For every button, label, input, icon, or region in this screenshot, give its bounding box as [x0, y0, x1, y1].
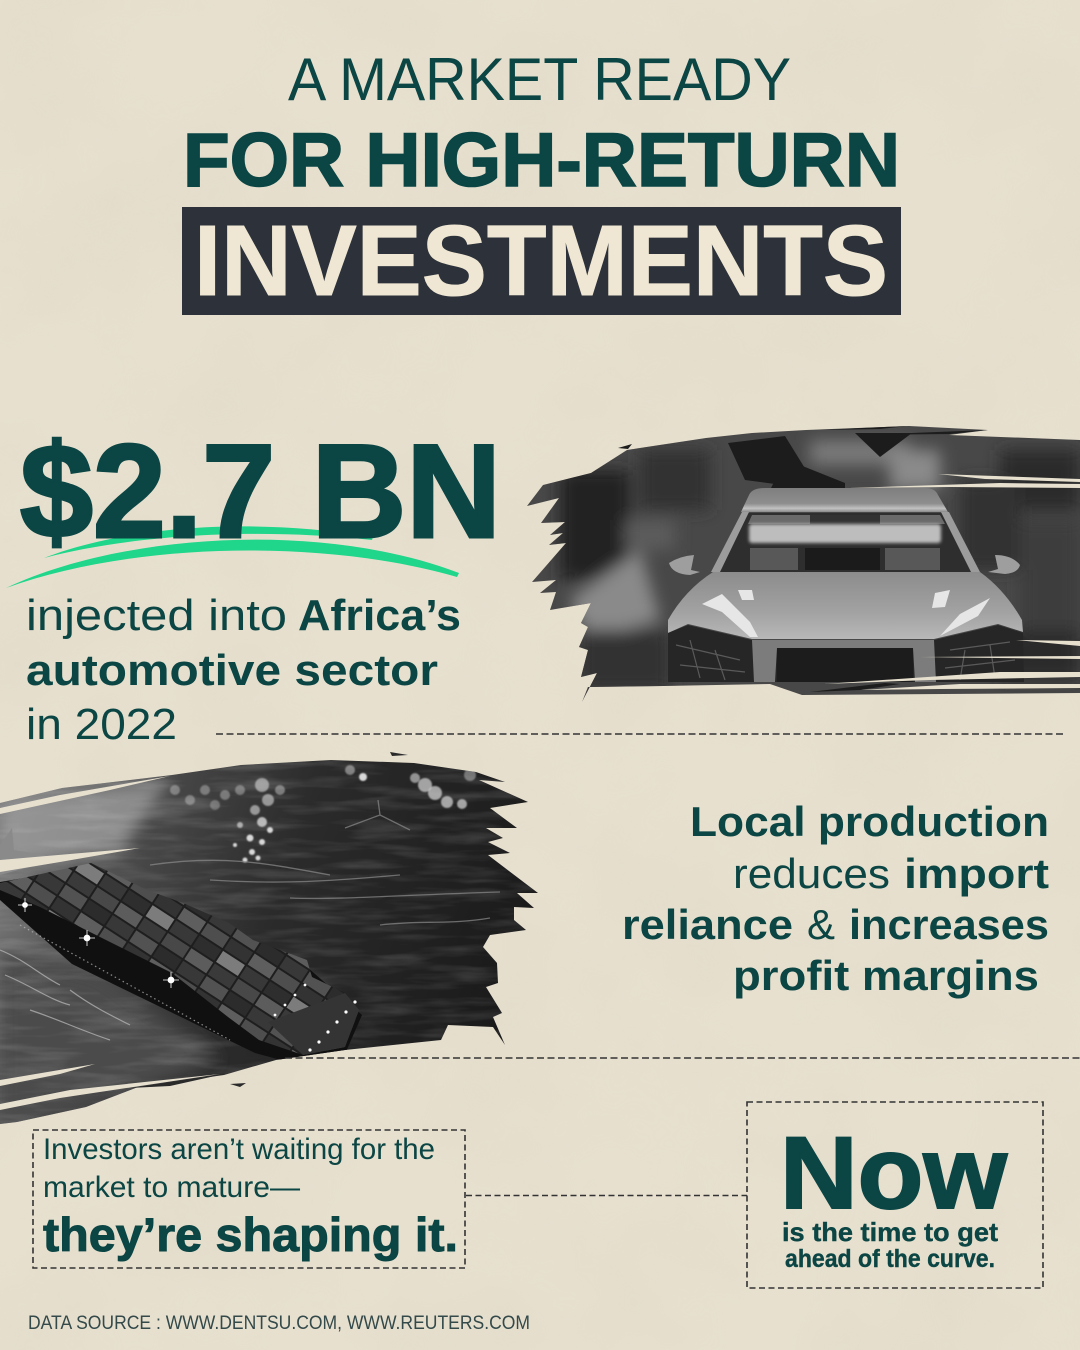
- panel: container ship photo: [0, 752, 540, 1130]
- data source footer: DATA SOURCE : WWW.DENTSU.COM, WWW.REUTERS.COM: [28, 1313, 530, 1334]
- callout: now is the time: Now: [780, 1116, 1008, 1230]
- brush streaks: [545, 468, 1080, 690]
- title line: a market ready: A MARKET READY: [288, 46, 791, 113]
- hood reflections: [702, 590, 990, 637]
- car mirrors: [669, 555, 1020, 575]
- car front end: [668, 625, 1024, 682]
- car windshield: [711, 512, 980, 572]
- panel: car assembly photo: [520, 420, 1080, 710]
- callout: now is the time: [747, 1102, 1043, 1288]
- callout: investors shaping the market: [33, 1130, 465, 1268]
- dark brush flicks: [618, 426, 988, 692]
- text block: automotive investment: Africa’s: [298, 591, 461, 640]
- ship containers: [0, 863, 359, 1055]
- dark brush flicks: [130, 752, 408, 1088]
- callout: investors shaping the market: they’re shaping it.: [43, 1208, 458, 1261]
- text block: automotive investment: in 2022: [26, 700, 177, 749]
- water: [0, 755, 540, 1130]
- robot arm: [728, 433, 910, 488]
- brush streaks: [0, 776, 220, 1110]
- text block: automotive investment: automotive sector: [26, 646, 438, 695]
- bow hint: [0, 828, 26, 875]
- icon: green underline swoosh: [6, 526, 459, 588]
- ship hull: [0, 867, 362, 1066]
- text block: automotive investment: [26, 591, 461, 749]
- connector line: [466, 1194, 747, 1196]
- water wave highlights: [150, 800, 500, 925]
- text block: local production: Local production: [690, 798, 1049, 845]
- water bokeh lights: [170, 765, 476, 862]
- ship sparkles: [18, 898, 356, 1051]
- text block: automotive investment: injected into: [26, 591, 287, 640]
- callout: investors shaping the market: Investors aren’t waiting for the: [43, 1133, 435, 1166]
- divider line lower: [285, 1057, 1080, 1059]
- divider line upper: [216, 733, 1064, 735]
- text block: local production: &: [807, 901, 835, 948]
- text block: local production: increases: [849, 901, 1049, 948]
- title line: for high-return: FOR HIGH-RETURN: [183, 118, 900, 203]
- text block: local production: profit margins: [733, 952, 1039, 999]
- title line: investments highlight: INVESTMENTS: [194, 205, 888, 317]
- title: [182, 46, 901, 317]
- callout: now is the time: ahead of the curve.: [785, 1245, 995, 1273]
- big number: $2.7 BN: $2.7 BN: [20, 418, 501, 566]
- text block: local production: reduces: [733, 850, 890, 897]
- car hood: [668, 572, 1023, 639]
- lit water beside hull: [0, 925, 230, 1040]
- car roof: [741, 488, 948, 512]
- callout: now is the time: is the time to get: [782, 1217, 998, 1247]
- text block: local production: [622, 798, 1049, 999]
- text block: local production: reliance: [622, 901, 793, 948]
- callout: investors shaping the market: market to mature—: [43, 1171, 300, 1204]
- photo background: [520, 420, 1080, 710]
- text block: local production: import: [904, 850, 1049, 897]
